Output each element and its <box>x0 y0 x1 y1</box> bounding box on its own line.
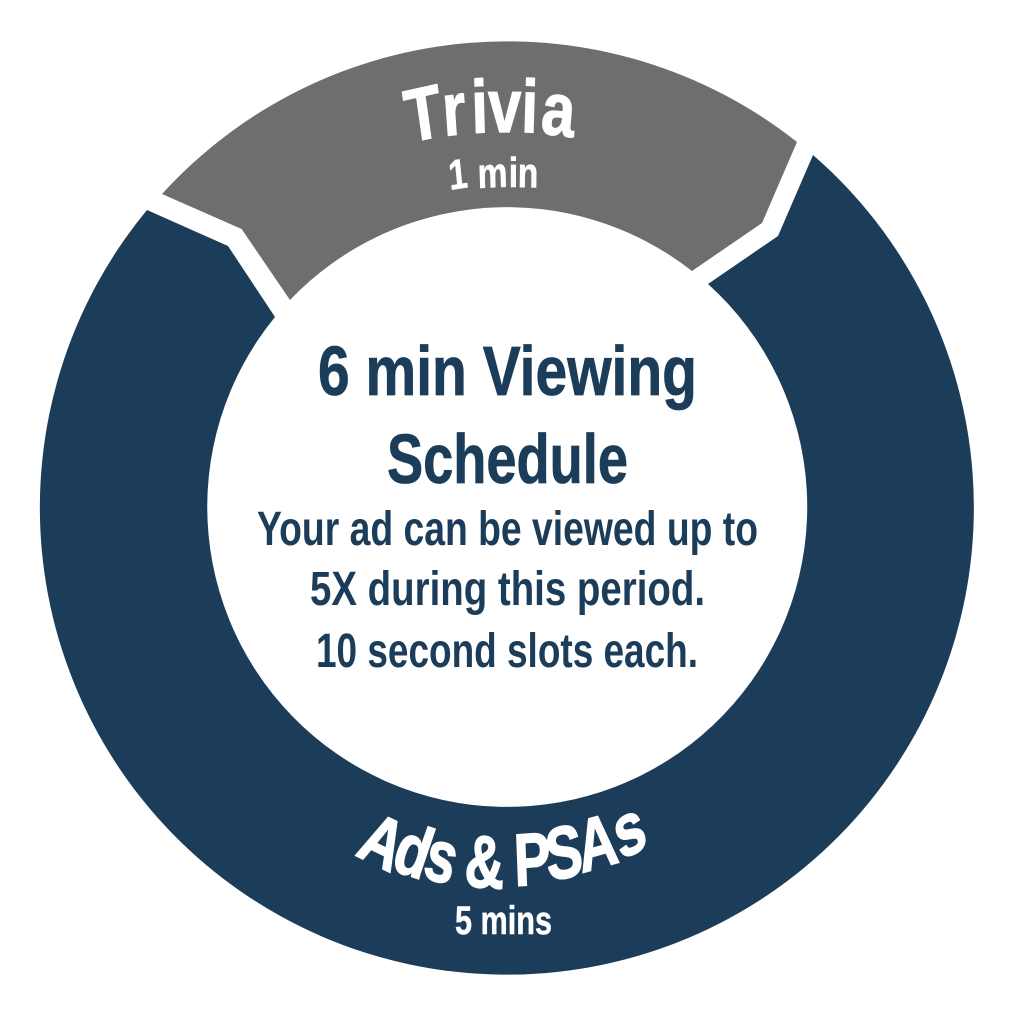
label: 1 min: 1 min <box>446 150 539 200</box>
segment: Trivia, 1 min <box>162 41 797 300</box>
center text block <box>257 332 758 678</box>
heading: 6 min Viewing Schedule: 6 min Viewing <box>318 332 697 410</box>
segment: Ads and PSAs, 5 mins <box>40 155 974 975</box>
body text: ad viewing details <box>257 503 758 678</box>
body text: ad viewing details: 10 second slots each. <box>316 625 698 678</box>
heading: 6 min Viewing Schedule <box>318 332 697 498</box>
label: 5 mins: 5 mins <box>455 899 552 943</box>
heading: 6 min Viewing Schedule: Schedule <box>387 420 628 498</box>
label: Trivia: Trivia <box>400 66 580 159</box>
label: Ads and PSAs: Ads & PSAs <box>351 783 654 905</box>
body text: ad viewing details: Your ad can be viewed up to <box>257 503 758 556</box>
body text: ad viewing details: 5X during this period. <box>310 563 705 616</box>
